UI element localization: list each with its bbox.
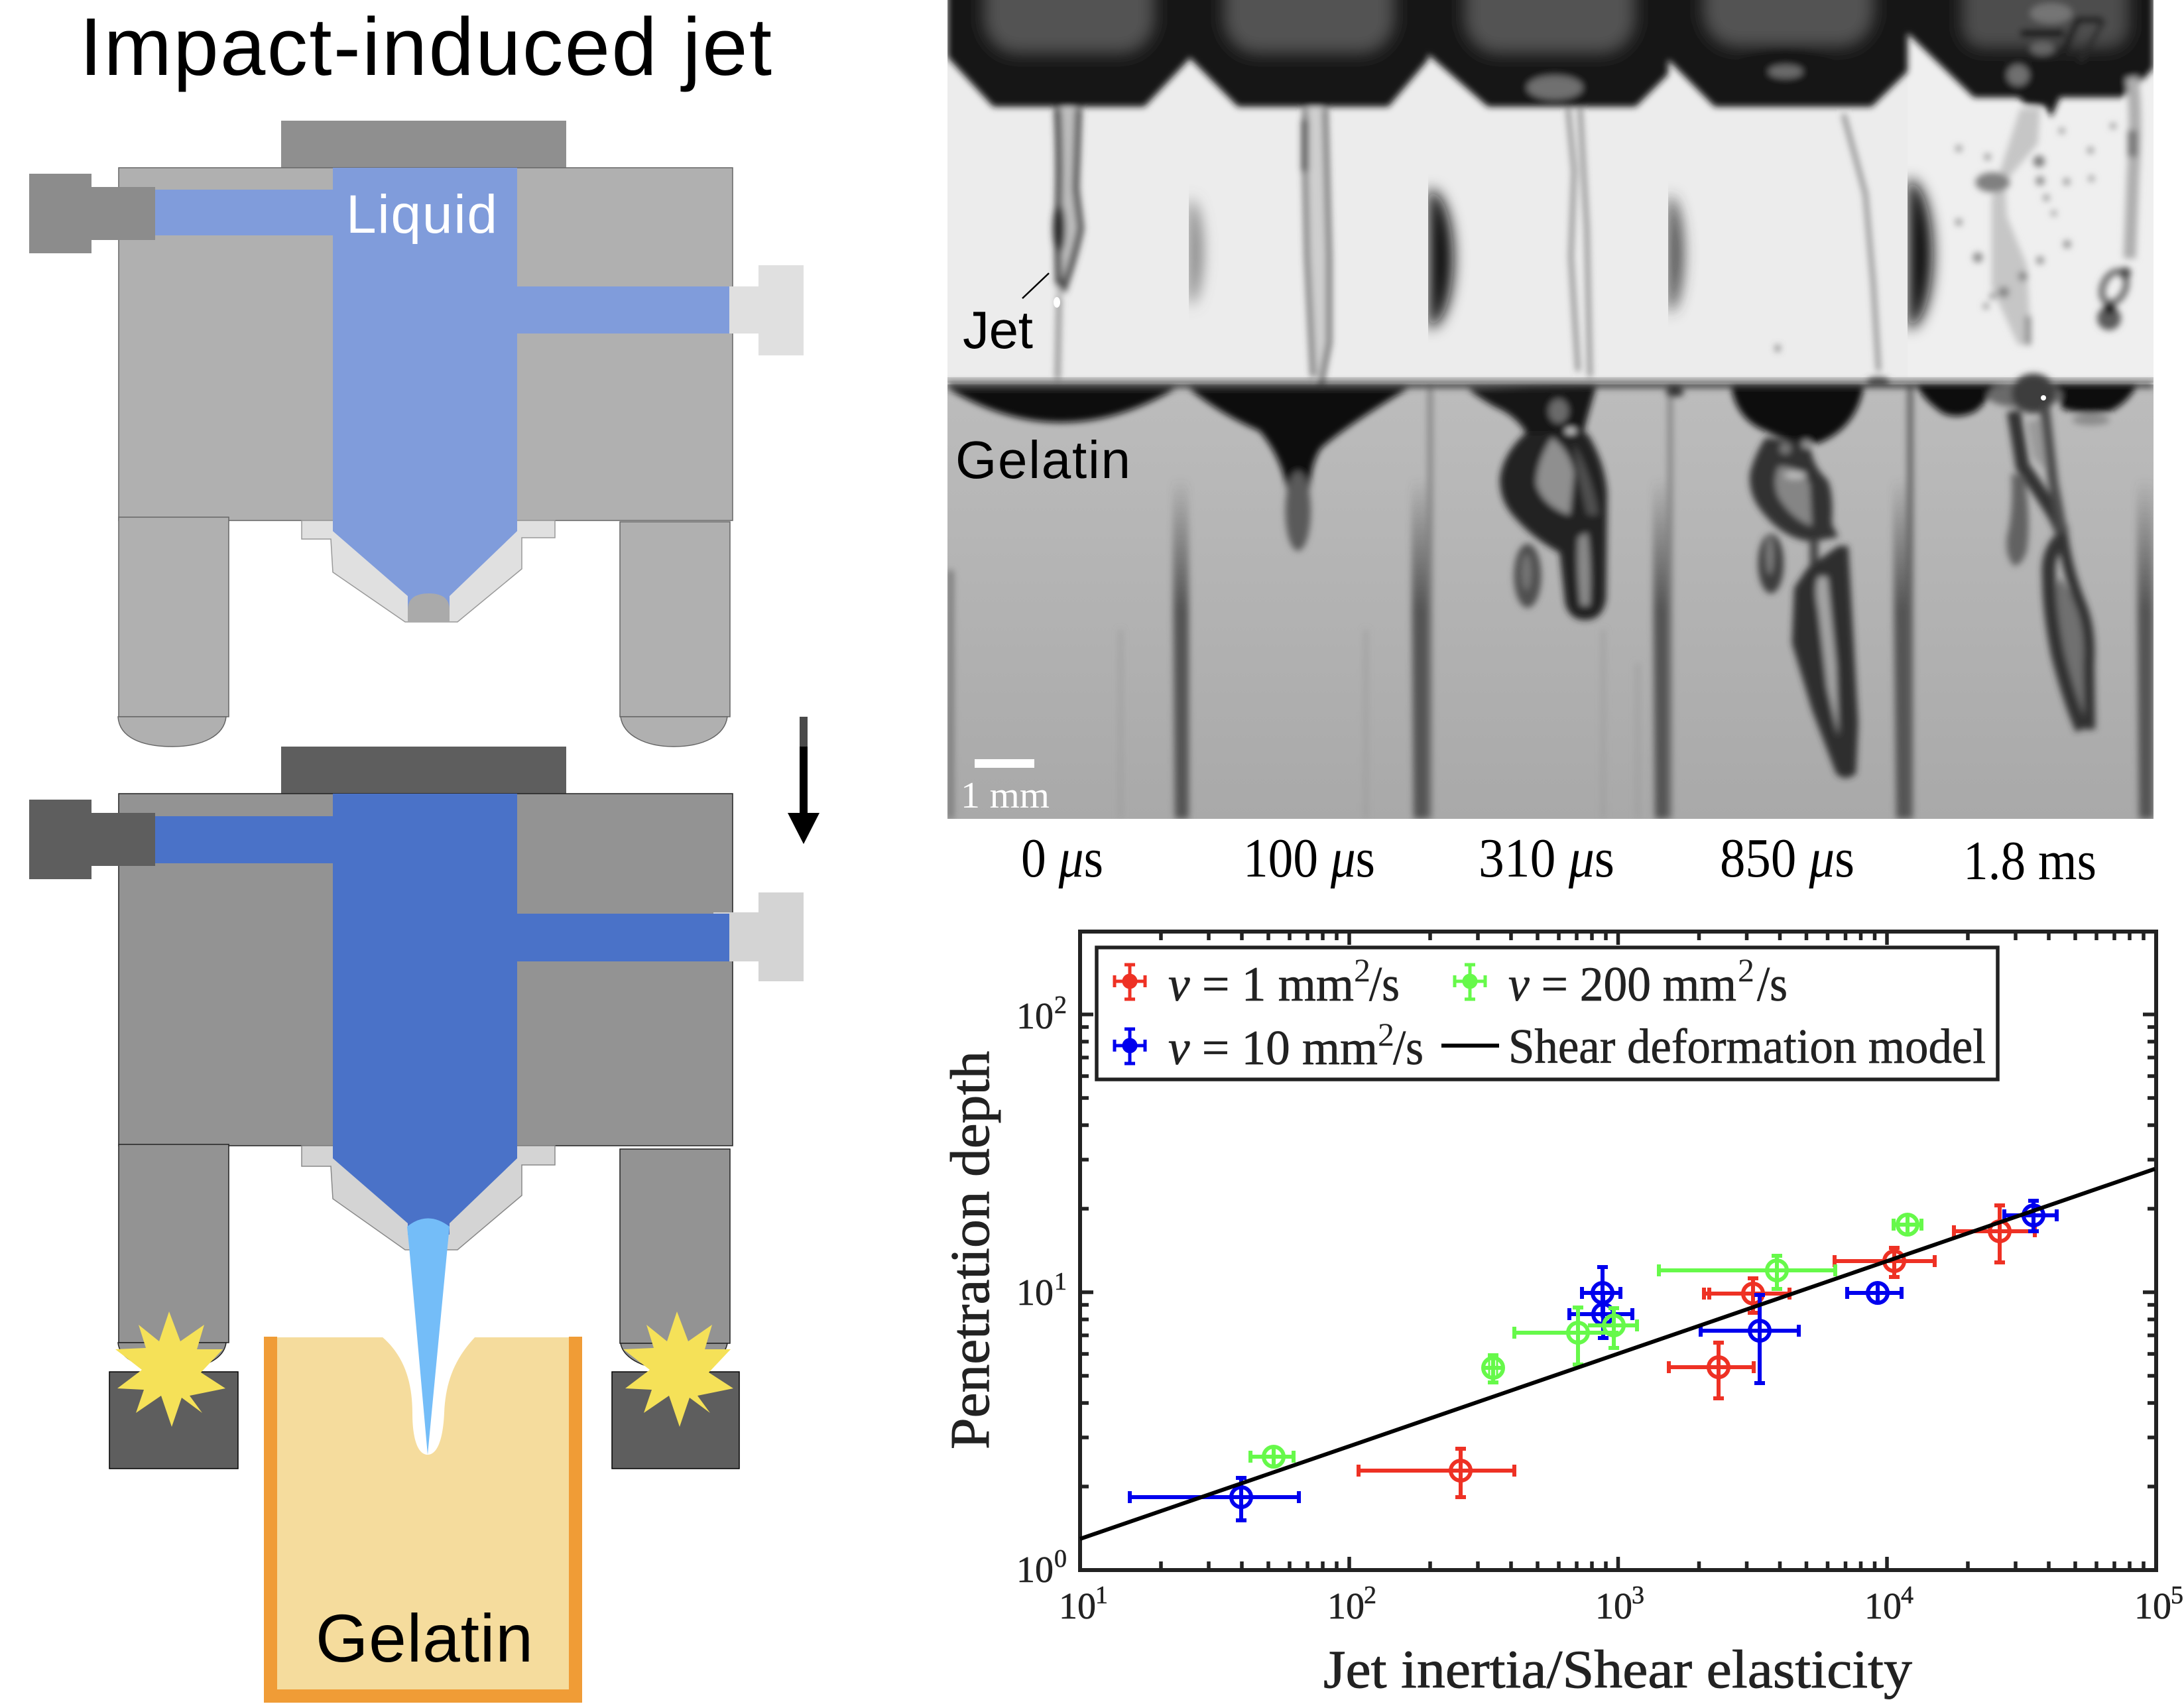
x axis title: Jet inertia/Shear elasticity — [1323, 1639, 1912, 1699]
left anvil — [109, 1372, 238, 1469]
nozzle inner shading — [985, 0, 1873, 53]
left crescents — [1189, 179, 1933, 329]
legend entry: 10 mm2/s: ν = 10 mm — [1168, 1021, 1378, 1075]
gelatin lens, frame 1 — [947, 388, 1176, 422]
y tick labels: 10 — [1016, 1272, 1054, 1313]
diagram: device before impact — [29, 121, 804, 747]
x tick labels: 10 — [2134, 1586, 2171, 1627]
y tick labels: 2 — [1054, 991, 1067, 1019]
title: Impact-induced jet — [80, 2, 772, 93]
legend entry: shear deformation model: Shear deformation model — [1508, 1020, 1986, 1074]
diagram: device during impact — [29, 747, 804, 1703]
label: 0 us: 0 μs — [1021, 827, 1103, 889]
label: 1.8 ms: 1.8 ms — [1963, 830, 2096, 892]
legend entry: 200 mm2/s — [1455, 951, 1788, 1012]
label: liquid: Liquid — [346, 184, 497, 245]
data series: 10 mm2/s — [1130, 1201, 2057, 1520]
right plug — [713, 892, 804, 981]
right impact burst — [623, 1311, 733, 1427]
left leg — [118, 517, 229, 747]
x tick labels: 10 — [1864, 1586, 1902, 1627]
legend entry: 1 mm2/s — [1115, 951, 1400, 1012]
cavity, frame 4 — [1666, 377, 1889, 778]
y tick labels: 10 — [1016, 996, 1054, 1037]
x tick labels: 10 — [1595, 1586, 1632, 1627]
cavity — [382, 1337, 475, 1455]
model line — [1080, 1169, 2155, 1539]
y tick labels — [1016, 991, 1067, 1591]
faint vertical marks — [1121, 630, 1638, 819]
x tick labels: 10 — [1327, 1586, 1365, 1627]
gelatin cavity, frame 2 — [1189, 388, 1408, 491]
legend entry: 200 mm2/s: ν = 200 mm — [1508, 957, 1736, 1012]
nozzle holder — [302, 1146, 555, 1250]
x tick labels: 5 — [2171, 1581, 2183, 1609]
nozzle, last frame — [1908, 0, 2154, 117]
arrow: downward motion — [788, 717, 819, 844]
right leg — [620, 1149, 730, 1370]
legend entry: 1 mm2/s: /s — [1369, 957, 1400, 1012]
liquid chamber — [155, 794, 729, 1235]
photo background — [947, 0, 2154, 819]
photo sequence — [947, 0, 2154, 819]
legend entry: 1 mm2/s: ν = 1 mm — [1168, 957, 1354, 1012]
annotation: jet: Jet — [963, 300, 1033, 359]
x tick labels: 10 — [1059, 1586, 1096, 1627]
time labels — [1021, 827, 2096, 892]
legend entry: 1 mm2/s: 2 — [1354, 951, 1370, 989]
label: 100 us: 100 μs — [1243, 827, 1375, 889]
right plug — [729, 265, 804, 355]
top cap — [281, 121, 566, 168]
left fitting — [29, 174, 155, 253]
plot frame — [1080, 932, 2156, 1570]
jets, frames 3 and 4 — [1568, 109, 1878, 377]
nozzle shading, last frame — [1963, 0, 2128, 48]
legend entry: 10 mm2/s: 2 — [1378, 1016, 1394, 1053]
liquid jet — [407, 1219, 450, 1455]
jets, frames 1 and 2 — [947, 109, 1408, 551]
x tick labels: 1 — [1095, 1581, 1108, 1609]
x tick labels: 4 — [1901, 1581, 1913, 1609]
interface line — [947, 383, 2154, 388]
annotation: gelatin: Gelatin — [955, 430, 1130, 489]
chart: penetration depth vs jet inertia/shear elasticity — [940, 932, 2183, 1699]
annotation: jet — [963, 273, 1049, 359]
left impact burst — [115, 1311, 225, 1427]
left fitting — [29, 800, 155, 879]
legend entry: 200 mm2/s: /s — [1757, 957, 1788, 1012]
label: gelatin: Gelatin — [316, 1601, 533, 1676]
data series: 200 mm2/s — [1250, 1213, 1921, 1467]
jet and droplets, last frame — [1955, 3, 2135, 345]
nozzles — [947, 0, 1908, 107]
cavity, frame 5 — [1916, 373, 2138, 729]
cavity, frame 3 — [1468, 387, 1607, 620]
axis ticks — [1080, 932, 2156, 1570]
top cap — [281, 747, 566, 794]
data series: 1 mm2/s — [1359, 1205, 2035, 1497]
nozzle details — [1527, 49, 1840, 99]
label: 850 us: 850 μs — [1720, 827, 1854, 889]
liquid chamber — [155, 168, 729, 622]
legend entry: 10 mm2/s — [1115, 1016, 1424, 1075]
scale bar: 1 mm — [961, 775, 1050, 816]
nozzle plug — [408, 593, 450, 622]
right anvil — [612, 1372, 739, 1469]
y tick labels: 1 — [1054, 1268, 1067, 1296]
legend entry: 200 mm2/s: 2 — [1738, 951, 1754, 989]
label: 310 us: 310 μs — [1479, 827, 1614, 889]
left leg — [118, 1144, 229, 1370]
side shadows — [947, 388, 2154, 819]
y axis title: Penetration depth — [940, 1051, 1001, 1449]
y tick labels: 0 — [1054, 1545, 1067, 1573]
specular spots — [1054, 297, 2046, 400]
x tick labels — [1059, 1581, 2183, 1627]
scale bar — [961, 759, 1050, 816]
nozzle holder — [302, 520, 555, 622]
x tick labels: 3 — [1632, 1581, 1644, 1609]
legend entry: 10 mm2/s: /s — [1393, 1021, 1424, 1075]
right leg — [620, 522, 730, 747]
device body — [119, 794, 733, 1146]
device body — [119, 168, 733, 520]
gelatin container — [264, 1337, 582, 1703]
y tick labels: 10 — [1016, 1550, 1054, 1591]
legend — [1097, 947, 1998, 1079]
x tick labels: 2 — [1364, 1581, 1376, 1609]
